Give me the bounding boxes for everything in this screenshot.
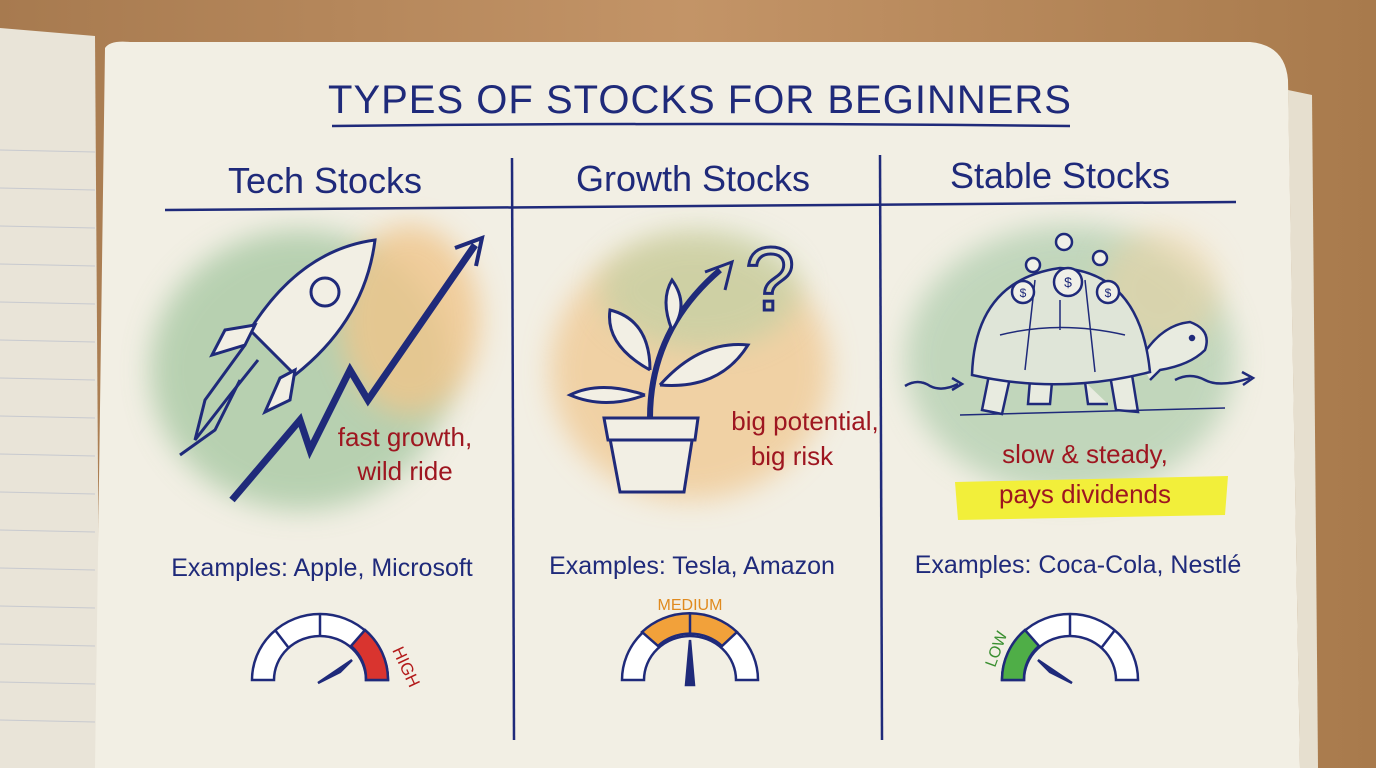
gauge: high: HIGH xyxy=(388,644,424,690)
left notebook page xyxy=(0,28,100,768)
column headings: Tech Stocks xyxy=(228,160,422,201)
gauge: high xyxy=(252,614,424,690)
examples: Examples: Tesla, Amazon xyxy=(549,552,835,580)
text: big risk xyxy=(751,441,834,471)
gauge: medium: MEDIUM xyxy=(658,597,722,614)
highlight: pays dividends xyxy=(955,476,1228,520)
icon: question mark: ? xyxy=(745,230,795,330)
examples: Examples: Coca-Cola, Nestlé xyxy=(915,551,1241,579)
examples xyxy=(171,551,1241,582)
title: TYPES OF STOCKS FOR BEGINNERS xyxy=(328,78,1072,122)
panel: stable: $ xyxy=(1064,274,1072,290)
gauge: low xyxy=(983,614,1138,683)
column headings xyxy=(228,155,1170,201)
arrow: rising zigzag xyxy=(232,245,475,500)
text: wild ride xyxy=(356,456,453,486)
panel: stable: $ xyxy=(1105,286,1112,300)
gauge: low: LOW xyxy=(983,628,1012,669)
text: tech tagline: fast growth, xyxy=(338,422,472,452)
panel: stable xyxy=(905,225,1253,495)
text: stable tagline: slow & steady, xyxy=(1002,439,1168,469)
column headings: Growth Stocks xyxy=(576,158,810,199)
icon: plant pot xyxy=(570,262,748,492)
text: growth tagline: big potential, xyxy=(731,406,879,436)
panel: growth xyxy=(550,230,879,500)
highlight: pays dividends: pays dividends xyxy=(999,479,1171,509)
panel: stable: $ xyxy=(1020,286,1027,300)
gauge: medium xyxy=(622,597,758,685)
examples: Examples: Apple, Microsoft xyxy=(171,554,473,582)
icon: rocket xyxy=(180,240,375,455)
panel: tech xyxy=(150,225,482,510)
column headings: Stable Stocks xyxy=(950,155,1170,196)
icon: turtle with coins xyxy=(972,234,1207,414)
